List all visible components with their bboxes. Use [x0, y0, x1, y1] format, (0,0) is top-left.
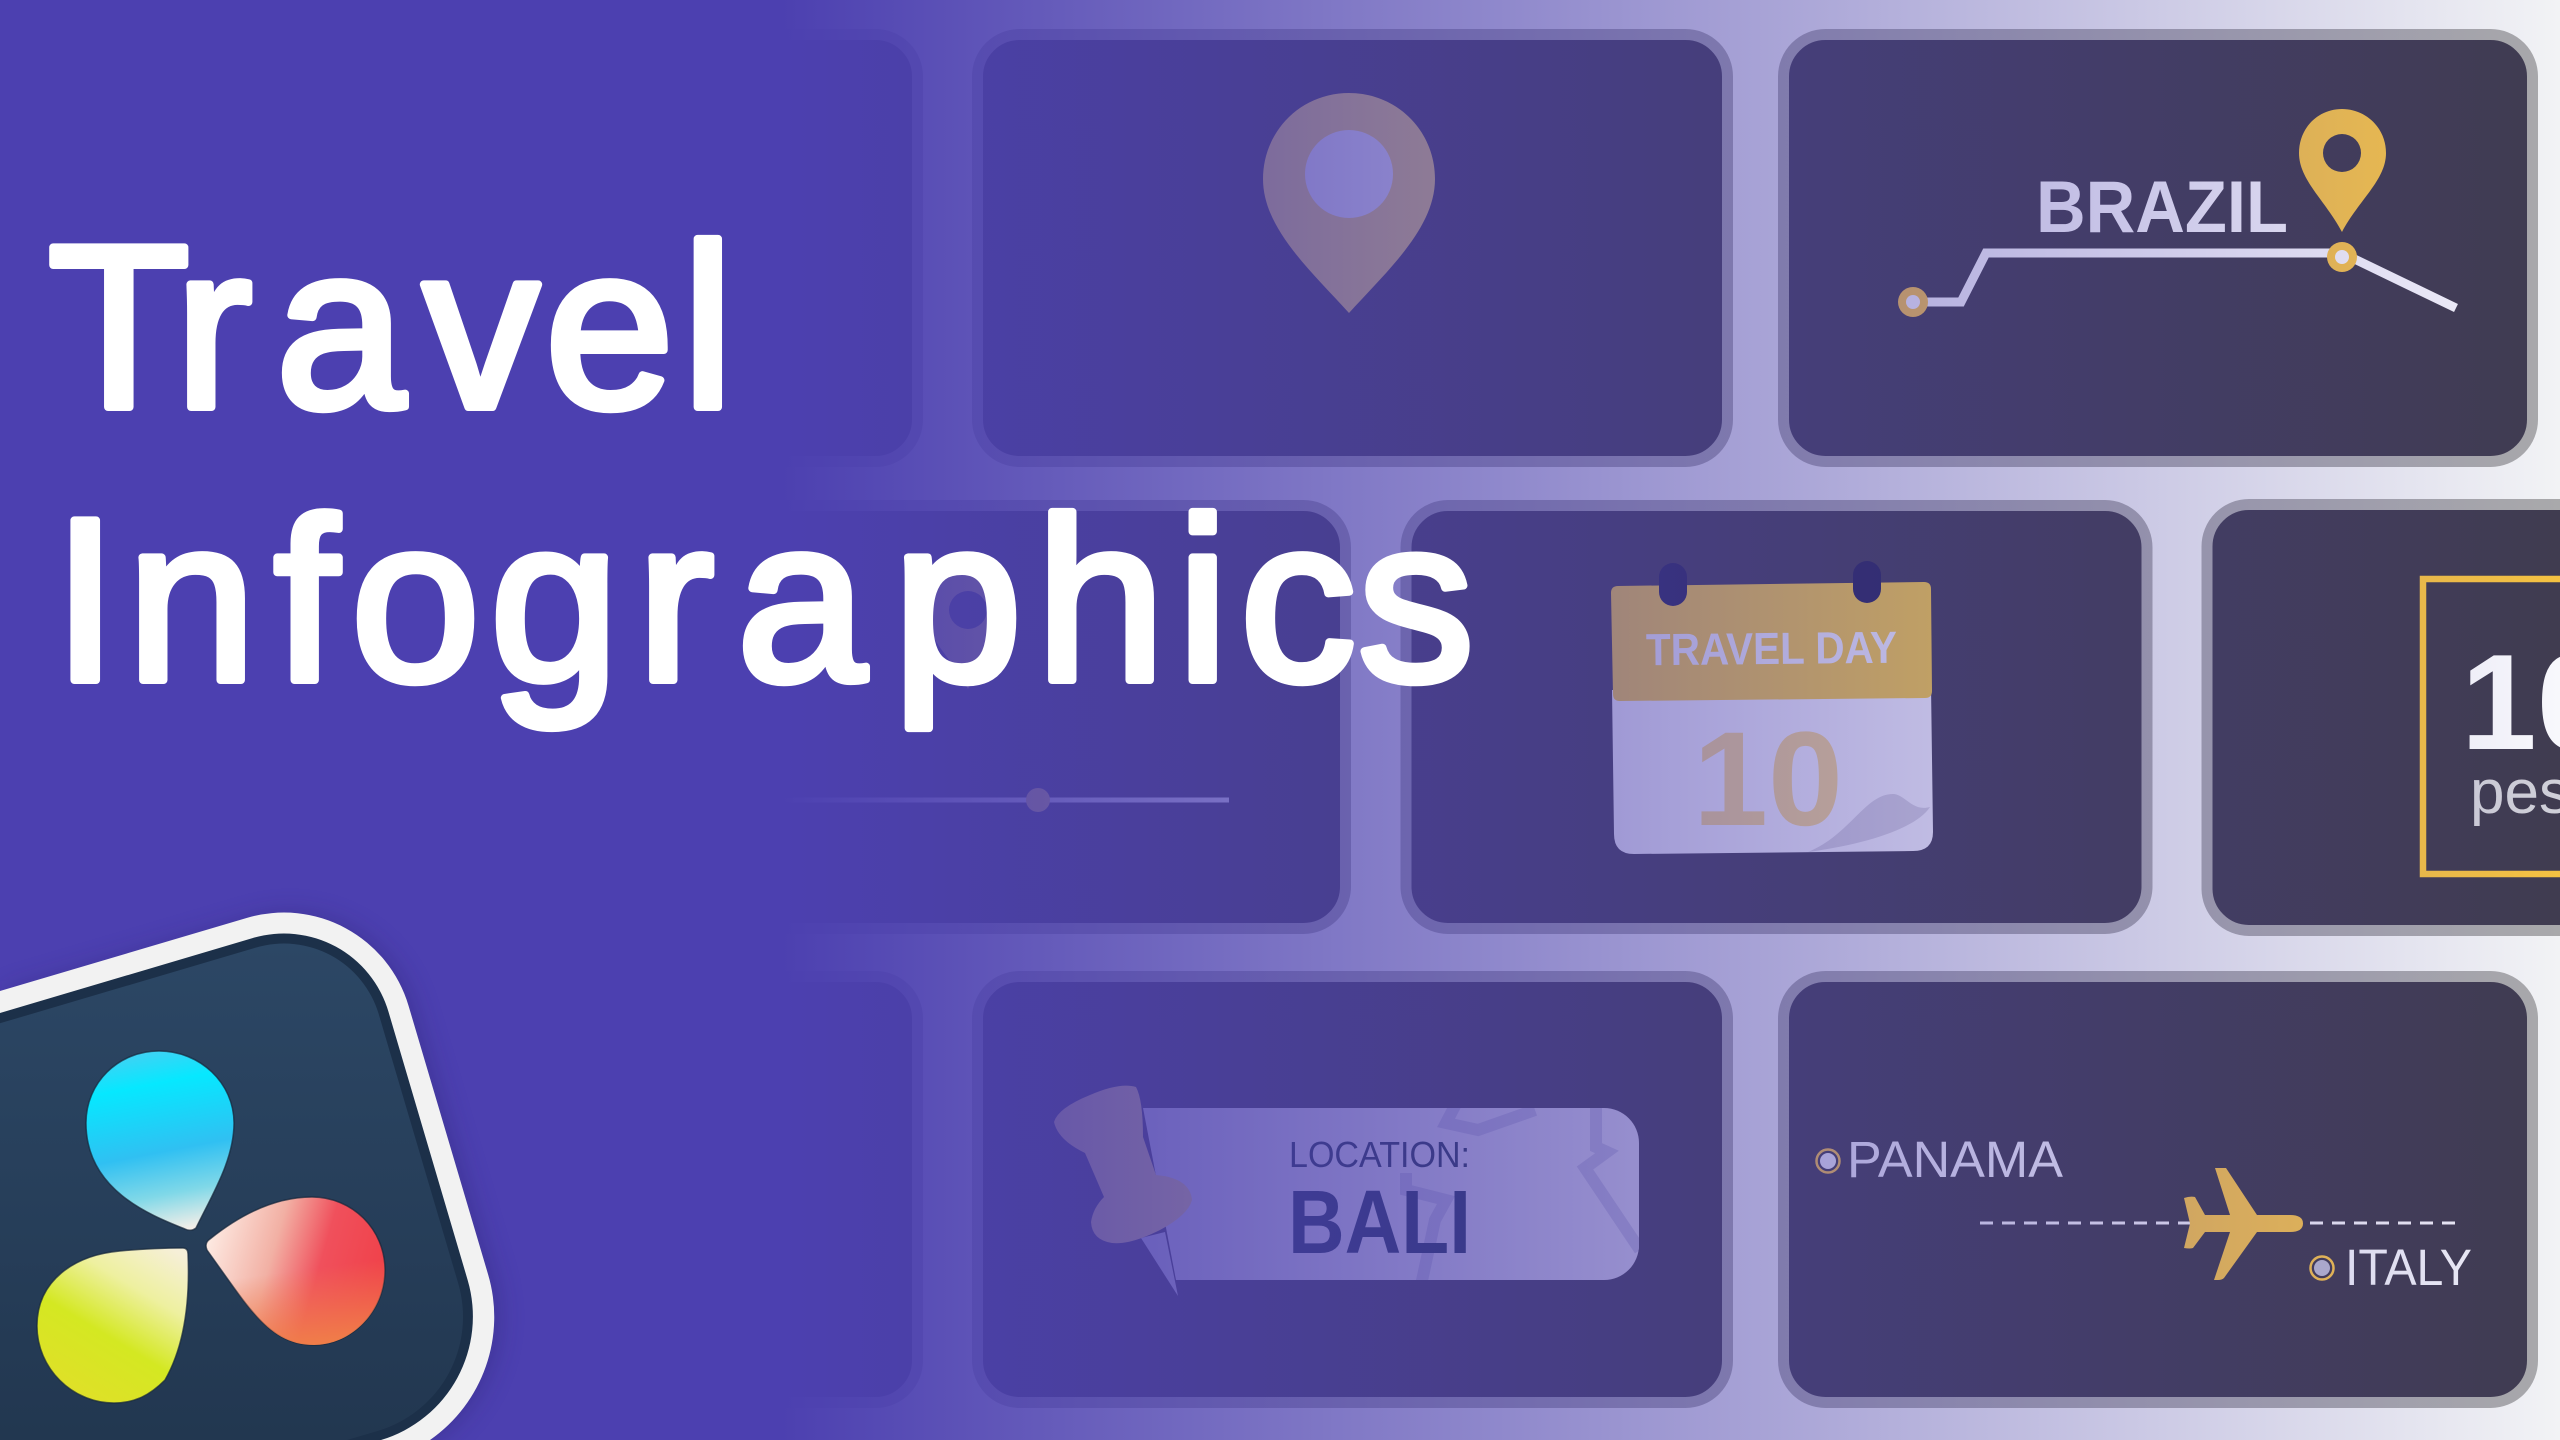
title — [48, 198, 1474, 730]
yellow drop — [37, 1248, 188, 1403]
panel: middle centre card with calendar — [1406, 506, 2147, 928]
origin label: PANAMA — [1847, 1131, 2063, 1188]
route line — [1913, 253, 2456, 308]
destination label: ITALY — [2345, 1239, 2472, 1296]
card border — [2207, 504, 2560, 930]
title line 1: Travel — [48, 198, 734, 457]
icon: gold pin — [2299, 109, 2386, 232]
panel: top middle card with location pin — [978, 34, 1728, 462]
panel: bottom left card — [168, 976, 918, 1402]
icon: large location pin — [1263, 93, 1435, 313]
heading: Brazil: BRAZIL — [2036, 167, 2288, 248]
icon: calendar — [1611, 561, 1933, 854]
slider line — [700, 798, 1229, 802]
cyan drop — [86, 1051, 234, 1230]
location banner — [1143, 1108, 1639, 1280]
panel: top right card with Brazil route — [1784, 34, 2532, 462]
panel: middle left card with slider — [170, 506, 1346, 928]
panel: top left card — [168, 34, 918, 462]
logo shadow — [6, 913, 500, 1440]
price frame — [2423, 579, 2560, 874]
location name: BALI — [1288, 1173, 1471, 1273]
logo white frame — [0, 913, 494, 1440]
icon: pin behind title — [925, 566, 1012, 689]
panel: bottom middle card with Bali location — [978, 976, 1728, 1402]
destination marker — [2310, 1256, 2334, 1280]
calendar title: TRAVEL DAY — [1646, 622, 1897, 675]
panel: middle right card with price — [2207, 504, 2560, 930]
location label: LOCATION: — [1289, 1134, 1470, 1175]
calendar number: 10 — [1693, 705, 1843, 854]
title line 2: Infographics — [53, 471, 1474, 730]
panel: bottom right card with flight — [1784, 976, 2532, 1402]
logo dark ring — [0, 933, 473, 1440]
origin marker — [1816, 1150, 1840, 1172]
map outline — [1406, 1100, 1640, 1290]
slider dot — [1026, 788, 1050, 812]
icon: thumbtack — [1054, 1086, 1192, 1296]
route end marker — [2327, 242, 2357, 272]
calendar header — [1611, 582, 1932, 701]
calendar page — [1612, 685, 1933, 854]
flight path — [1980, 1222, 2458, 1224]
icon: DaVinci Resolve logo — [0, 913, 500, 1440]
calendar ring right — [1853, 561, 1881, 603]
logo plate — [0, 944, 463, 1440]
calendar page curl — [1808, 794, 1930, 852]
red drop — [206, 1197, 385, 1345]
calendar ring left — [1659, 563, 1687, 606]
route start marker — [1898, 287, 1928, 317]
icon: airplane — [2184, 1168, 2303, 1280]
